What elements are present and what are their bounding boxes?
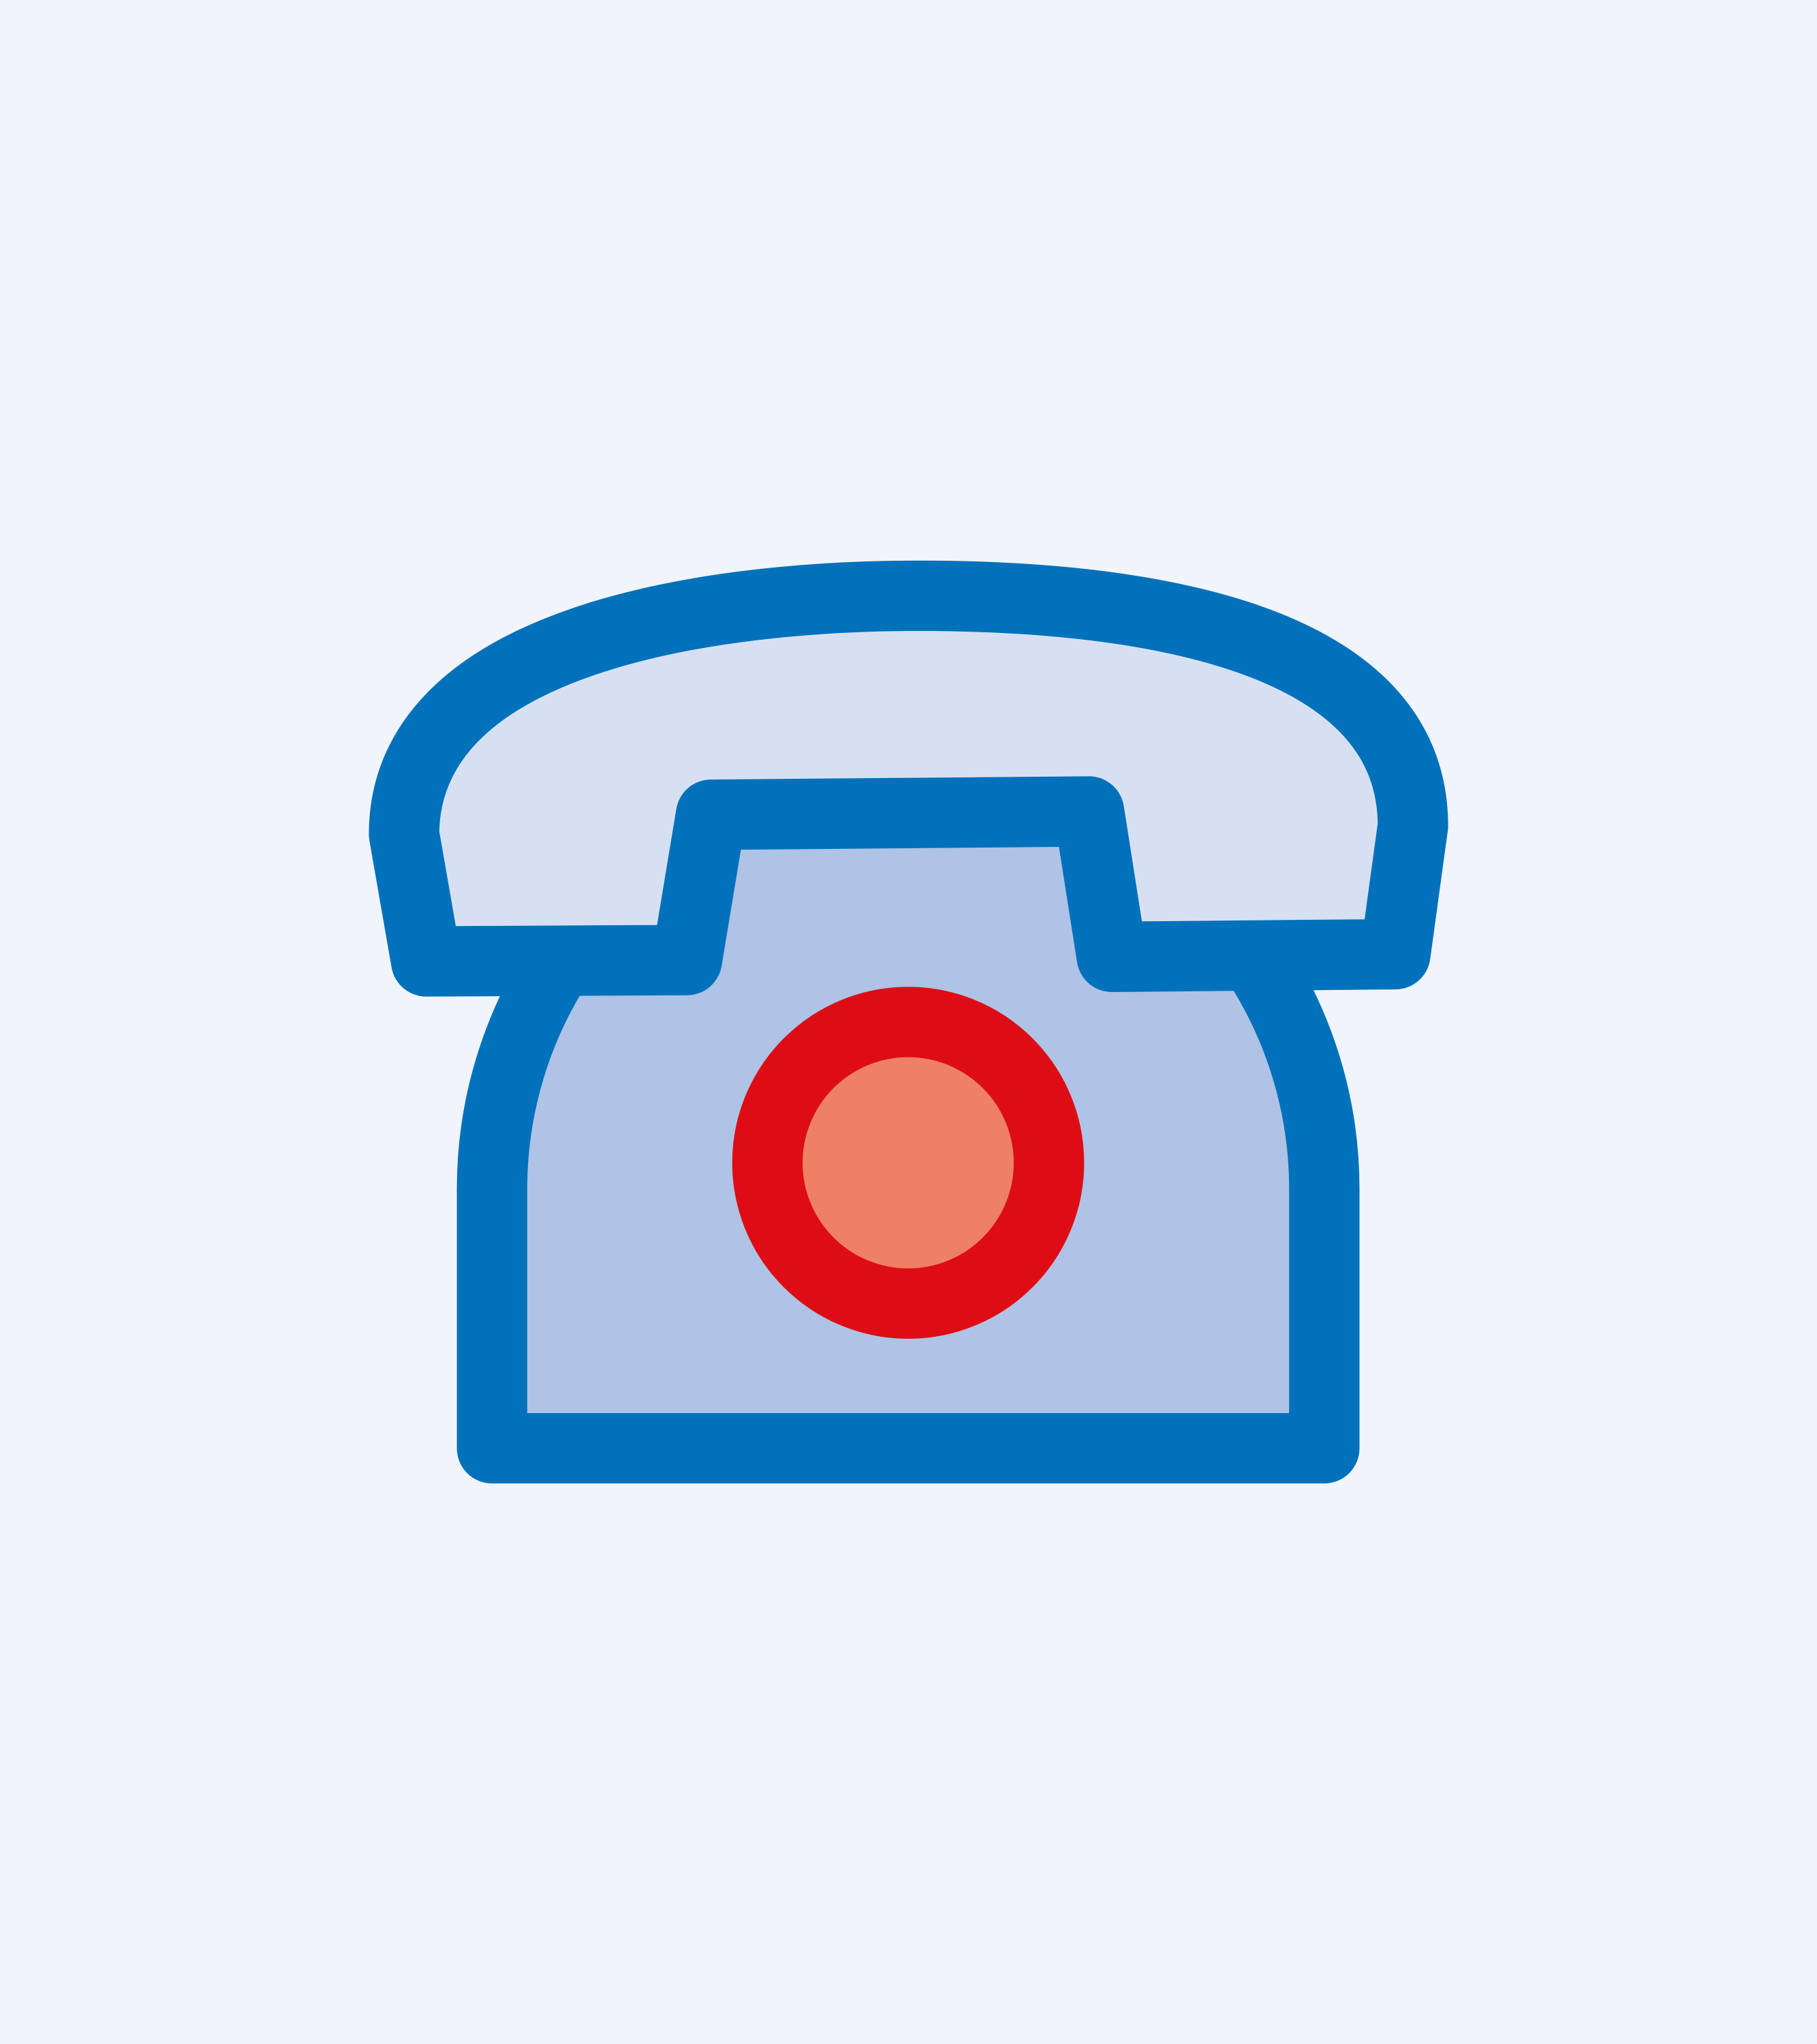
rotary dial bbox=[767, 1022, 1049, 1303]
phone body fill bbox=[492, 828, 1324, 1449]
phone body outline bbox=[492, 958, 1324, 1449]
telephone bbox=[404, 595, 1413, 1449]
handset bbox=[404, 595, 1413, 961]
